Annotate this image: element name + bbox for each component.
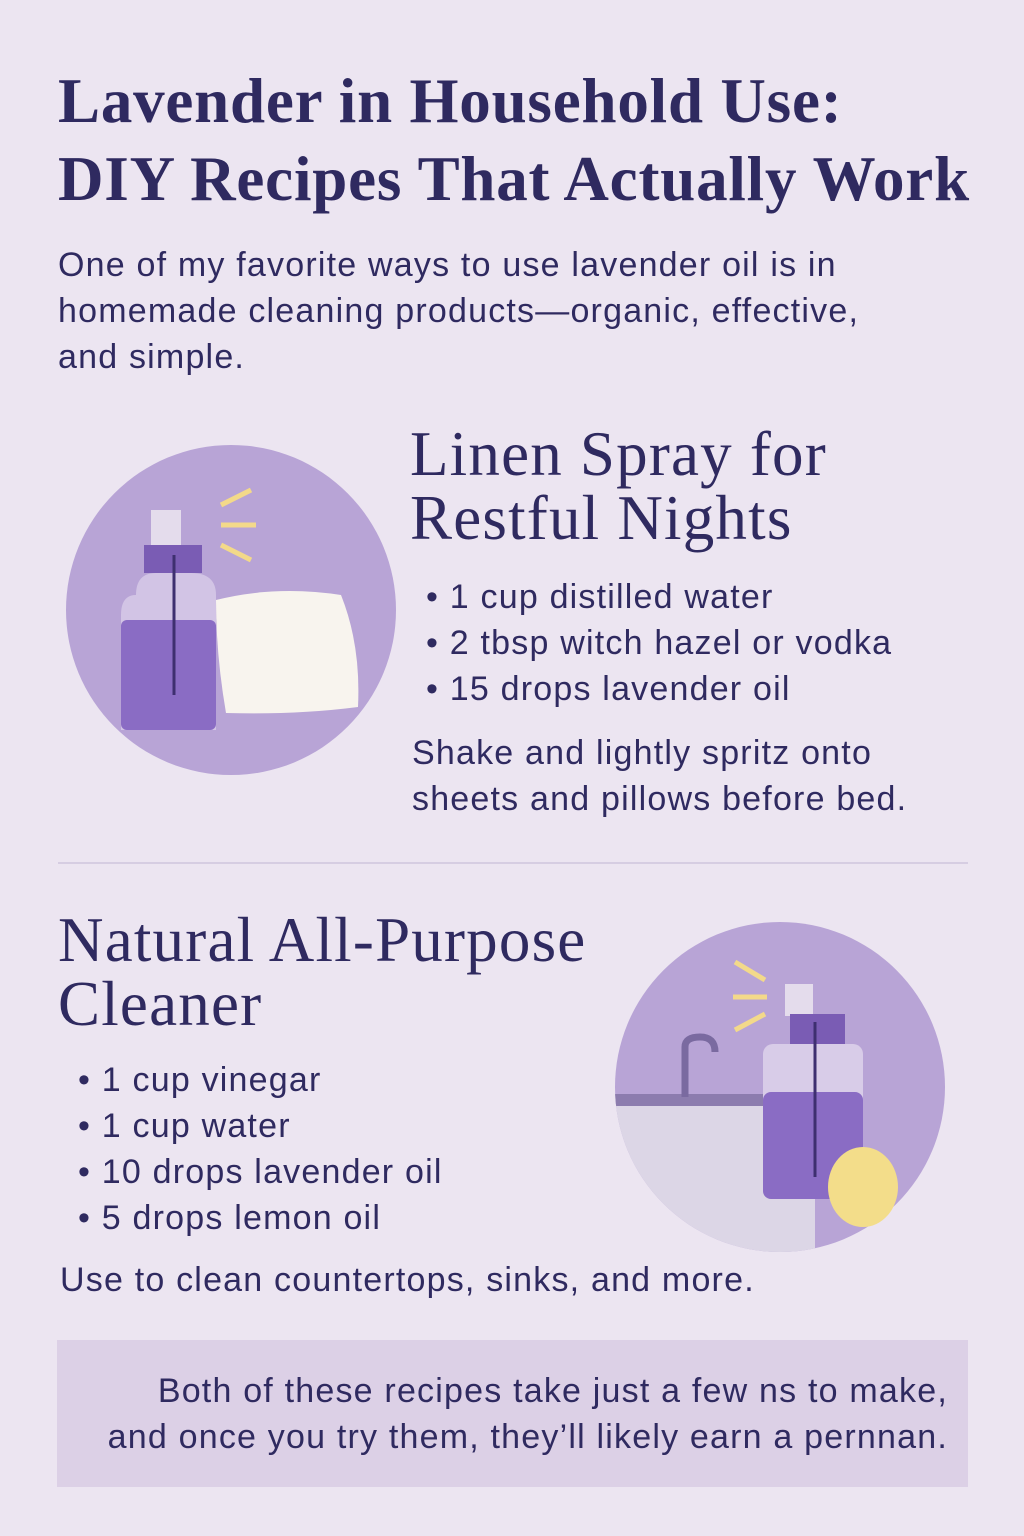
callout text: Both of these recipes take just a few ns to make,: [158, 1372, 948, 1410]
text: linen instructions: Shake and lightly spritz onto: [412, 734, 872, 772]
intro text: [58, 246, 859, 376]
bullets: linen spray: 1 cup distilled water: [450, 578, 774, 616]
heading: cleaner: Cleaner: [58, 969, 262, 1039]
bullets: cleaner: 5 drops lemon oil: [102, 1199, 381, 1237]
text: cleaner use: Use to clean countertops, sinks, and more.: [60, 1261, 755, 1299]
intro text: One of my favorite ways to use lavender oil is in: [58, 246, 837, 284]
heading: linen spray: Restful Nights: [410, 483, 793, 553]
intro text: and simple.: [58, 338, 245, 376]
heading: cleaner: Natural All-Purpose: [58, 905, 586, 975]
intro text: homemade cleaning products—organic, effective,: [58, 292, 859, 330]
callout text: [108, 1372, 948, 1456]
bullets: cleaner: 1 cup vinegar: [102, 1061, 321, 1099]
title: Lavender in Household Use:: [58, 66, 842, 136]
bullets: cleaner: 1 cup water: [102, 1107, 291, 1145]
icon: cleaner bottle: [615, 922, 945, 1252]
heading: cleaner: [58, 905, 586, 1039]
title: [58, 66, 970, 214]
heading: linen spray: [410, 419, 827, 553]
callout box: [57, 1340, 968, 1487]
icon: linen spray: [66, 445, 396, 775]
callout text: and once you try them, they’ll likely earn a pernnan.: [108, 1418, 948, 1456]
bullets: cleaner: [79, 1061, 443, 1237]
bullets: cleaner: 10 drops lavender oil: [102, 1153, 443, 1191]
bullets: linen spray: [427, 578, 892, 708]
text: linen instructions: sheets and pillows before bed.: [412, 780, 907, 818]
heading: linen spray: Linen Spray for: [410, 419, 827, 489]
bullets: linen spray: 15 drops lavender oil: [450, 670, 791, 708]
text: linen instructions: [412, 734, 907, 818]
bullets: linen spray: 2 tbsp witch hazel or vodka: [450, 624, 892, 662]
title: DIY Recipes That Actually Work: [58, 144, 970, 214]
